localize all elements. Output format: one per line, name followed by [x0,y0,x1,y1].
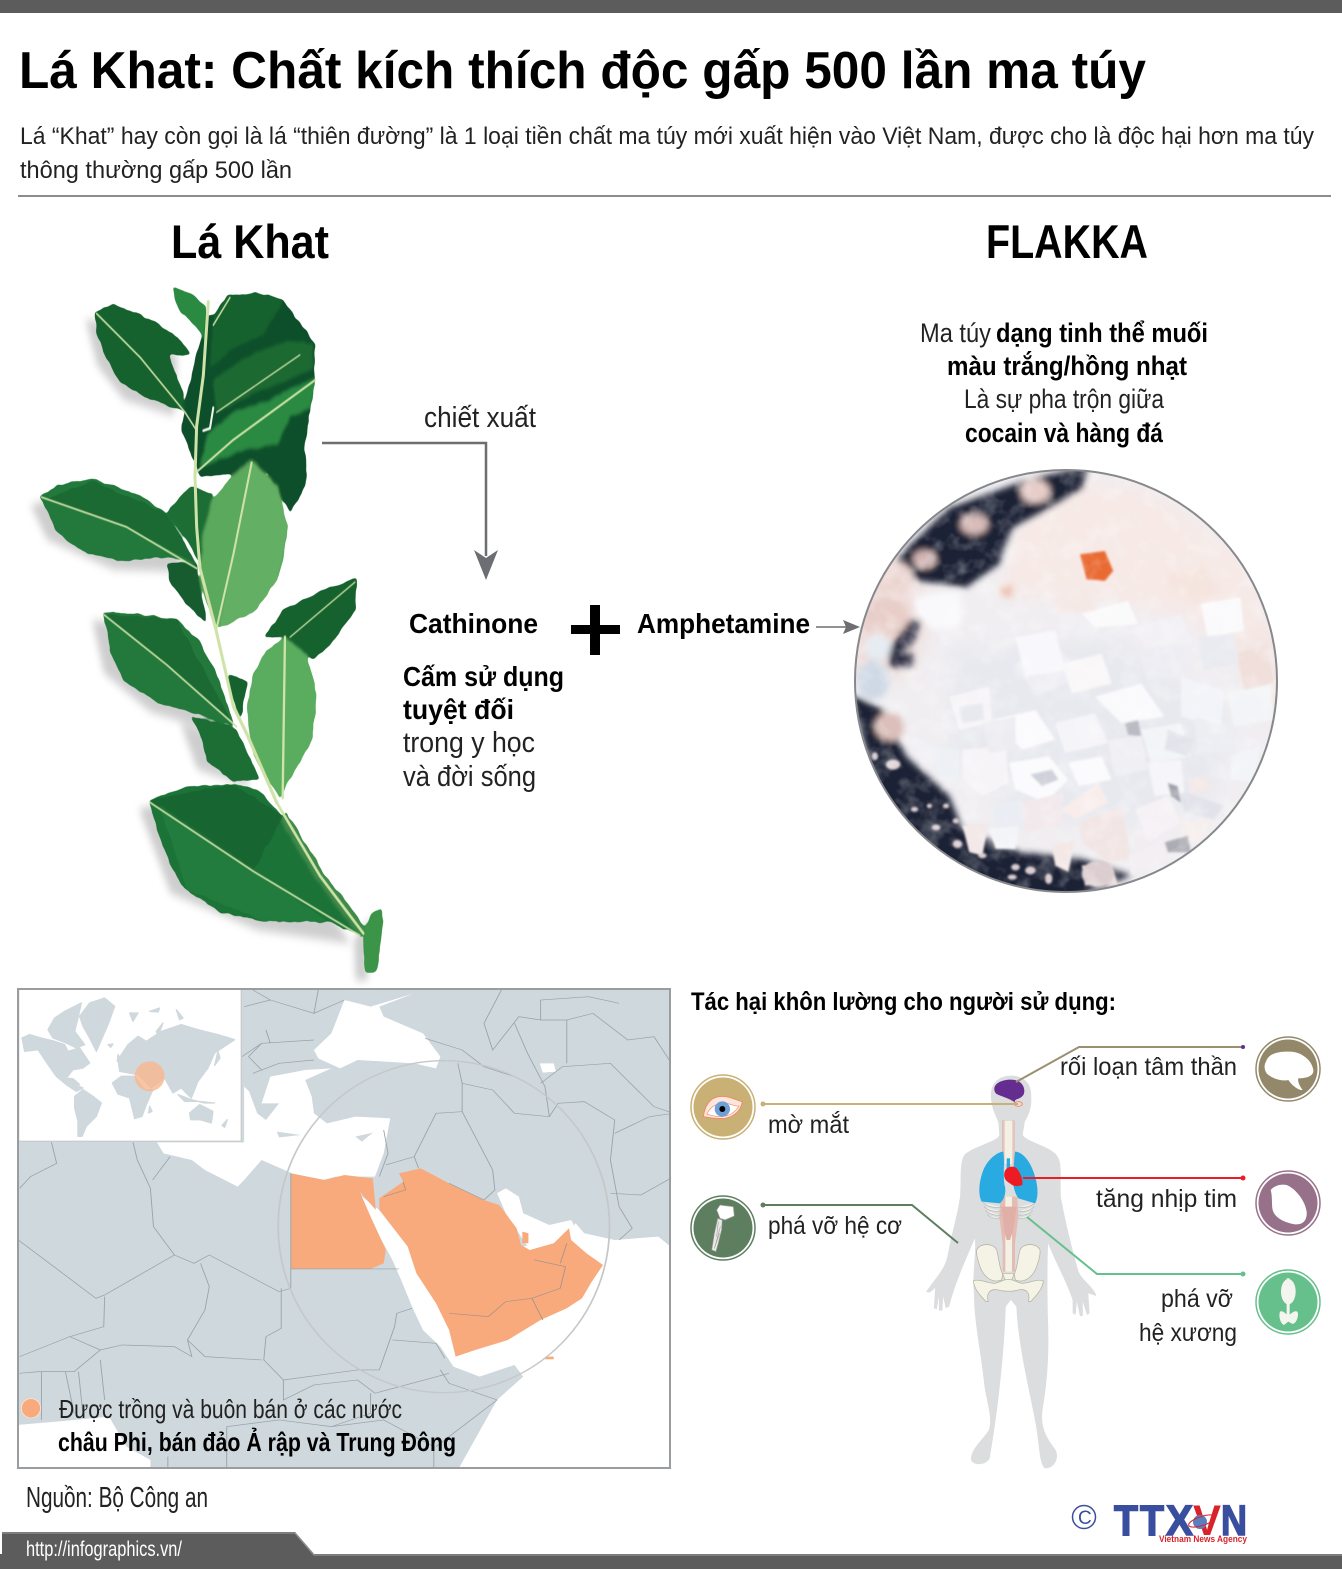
text: cathinone warning: và đời sống [403,761,536,793]
ribs [983,1203,1035,1219]
label: chiết xuất: chiết xuất [424,402,536,434]
map legend text [58,1394,456,1457]
arrow: to flakka [816,620,860,634]
text: cathinone warning: Cấm sử dụng [403,661,564,692]
pelvis [973,1244,1043,1302]
text: flakka description: dạng tinh thể muối [996,318,1208,348]
intro text: thông thường gấp 500 lần [20,157,292,184]
icon: muscle [691,1196,755,1260]
heading: FLAKKA: FLAKKA [986,215,1148,268]
lungs [979,1152,1037,1203]
plus sign [571,605,620,655]
logo: TTXVN [1072,1497,1247,1545]
text: cathinone warning: tuyệt đối [403,694,514,725]
callout lines [760,1045,1246,1276]
text: flakka description [920,318,1208,448]
intro text: Lá “Khat” hay còn gọi là lá “thiên đường” là 1 loại tiền chất ma túy mới xuất hiện vào Việt Nam, được cho là độc hại hơn ma túy [20,123,1314,150]
brain [994,1080,1024,1103]
legend dot [21,1399,41,1418]
text: cathinone warning [403,661,564,793]
label: tăng nhịp tim: tăng nhịp tim [1096,1185,1237,1213]
map: seas [17,993,674,1470]
title: Lá Khat: Chất kích thích độc gấp 500 lần ma túy [19,42,1146,100]
icon: skeleton [1256,1270,1320,1334]
photo: flakka crystals [850,465,1282,902]
spine [999,1121,1018,1272]
photo border [855,470,1277,892]
map: focus ellipse [278,1061,610,1393]
label: phá vỡ hệ xương: hệ xương [1139,1319,1237,1347]
top bar [0,0,1342,13]
map: highlighted countries [291,1168,603,1359]
label: Amphetamine: Amphetamine [637,608,810,639]
body organs [973,1080,1043,1302]
icon: brain [1256,1037,1320,1101]
logo: TTXVN: N [1221,1497,1247,1545]
footer url: http://infographics.vn/ [26,1538,182,1561]
label: mờ mắt: mờ mắt [768,1110,849,1139]
label: Cathinone: Cathinone [409,608,538,639]
icon: eye [691,1075,755,1139]
illustration: khat leaf branch [31,286,383,981]
map legend text: châu Phi, bán đảo Ả rập và Trung Đông [58,1427,456,1457]
map legend text: Được trồng và buôn bán ở các nước [59,1394,402,1424]
text: flakka description: màu trắng/hồng nhạt [947,350,1187,381]
intro text [20,123,1314,184]
logo: TTXVN: C [1078,1508,1092,1529]
illustration: human body [926,1076,1096,1468]
logo: TTXVN: T [1140,1497,1164,1545]
logo: TTXVN: X [1166,1497,1193,1545]
logo: TTXVN: T [1114,1497,1138,1545]
logo: TTXVN: V [1193,1497,1221,1545]
label: phá vỡ hệ xương: phá vỡ [1161,1285,1233,1313]
label: phá vỡ hệ xương [1139,1285,1237,1347]
map: country borders [18,990,674,1468]
arrow: extraction [322,443,498,580]
icon: heart [1256,1171,1320,1235]
label: rối loạn tâm thần: rối loạn tâm thần [1060,1053,1237,1081]
map: islands and Greece [249,1090,373,1142]
footer bar [0,1532,1342,1569]
text: cathinone warning: trong y học [403,727,535,759]
label: phá vỡ hệ cơ: phá vỡ hệ cơ [768,1212,902,1240]
map frame [18,989,670,1468]
inset: world map [19,989,241,1141]
body silhouette [926,1076,1096,1468]
heading: Lá Khat: Lá Khat [171,215,329,268]
heart [1004,1167,1023,1186]
text: flakka description: Ma túy [920,318,991,348]
logo: TTXVN: Vietnam News Agency [1159,1534,1247,1544]
source: Nguồn: Bộ Công an [26,1482,208,1514]
leaf shading [43,463,330,922]
map panel [17,989,674,1470]
eye [1014,1102,1022,1106]
text: flakka description: Là sự pha trộn giữa [964,384,1165,414]
text: flakka description: cocain và hàng đá [965,418,1164,448]
heading: harms: Tác hại khôn lường cho người sử dụng: [691,988,1116,1016]
stem and veins [42,298,363,936]
